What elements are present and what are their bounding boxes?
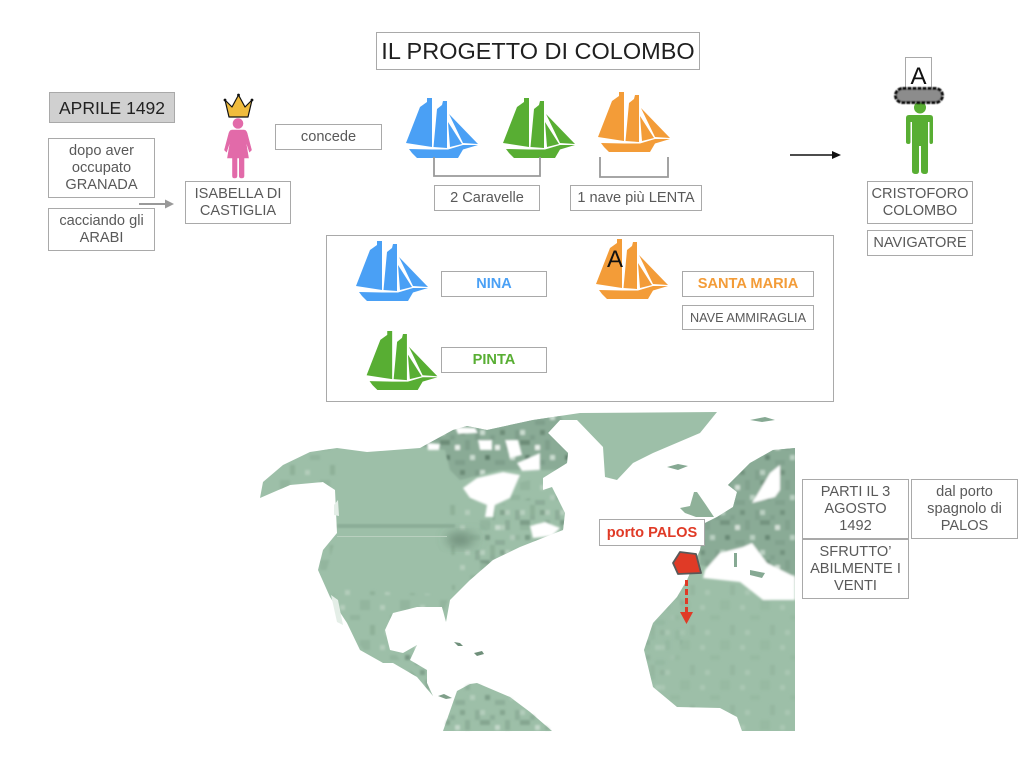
map: Mediterranean and Baltic white areas (703, 465, 795, 600)
label: Santa Maria (682, 271, 814, 297)
label: Santa Maria: SANTA MARIA (698, 276, 798, 292)
map: islands of Iceland, Svalbard, UK (667, 417, 775, 470)
arrow: from Granada to Isabella (139, 200, 174, 208)
text box: cacciando gli Arabi: cacciando gli (59, 213, 144, 229)
text box: sfruttò abilmente i venti: SFRUTTO’ (820, 544, 891, 560)
map: Hudson Bay white patch (463, 472, 520, 517)
map: North Atlantic, Americas, Europe and Africa (260, 412, 795, 731)
text box: Isabella di Castiglia (185, 181, 291, 224)
bracket: two caravels (434, 157, 540, 176)
label: Pinta (441, 347, 547, 373)
text box: concede (275, 124, 382, 150)
text box: Cristoforo Colombo: COLOMBO (883, 203, 957, 219)
text box: sfruttò abilmente i venti (802, 539, 909, 599)
icon: Pinta ship (367, 331, 437, 390)
title: IL PROGETTO DI COLOMBO (381, 38, 695, 64)
text box: dopo aver occupato Granada: dopo aver (69, 143, 134, 159)
title (376, 32, 700, 70)
icon: green ship (503, 98, 575, 158)
letter box on the hat (905, 57, 932, 93)
icon: Santa Maria ship with letter: A (607, 246, 623, 273)
label: porto Palos: porto PALOS (607, 524, 697, 540)
text box: dal porto spagnolo di Palos: dal porto (936, 484, 993, 500)
icon: Palos marker (673, 552, 701, 574)
text box: dal porto spagnolo di Palos: spagnolo di (927, 501, 1002, 517)
map land: Europe and Africa (644, 448, 795, 731)
icon: crown (224, 94, 253, 117)
text box: 2 Caravelle: 2 Caravelle (450, 190, 524, 206)
label: Nina: NINA (476, 276, 512, 292)
label: porto Palos (599, 519, 705, 546)
bracket: one slower ship (600, 157, 668, 177)
text box: partì il 3 agosto 1492: AGOSTO (824, 501, 887, 517)
arrow: route from Palos (680, 580, 693, 624)
text box: 2 Caravelle (434, 185, 540, 211)
text box: partì il 3 agosto 1492: PARTI IL 3 (821, 484, 890, 500)
text box: dal porto spagnolo di Palos: PALOS (941, 518, 988, 534)
text box: 1 nave più lenta: 1 nave più LENTA (577, 190, 695, 206)
label: Nave ammiraglia (682, 305, 814, 330)
text box: dopo aver occupato Granada: GRANADA (65, 177, 138, 193)
text box: Navigatore (867, 230, 973, 256)
text box: dal porto spagnolo di Palos (911, 479, 1018, 539)
text box: Cristoforo Colombo: CRISTOFORO (871, 186, 969, 202)
icon: Santa Maria ship with letter (596, 239, 668, 299)
text box: cacciando gli Arabi (48, 208, 155, 251)
icon: hat (896, 88, 942, 102)
icon: Colombo, man figure (906, 102, 933, 174)
label: Nave ammiraglia: NAVE AMMIRAGLIA (690, 310, 806, 324)
text box: 1 nave più lenta (570, 185, 702, 211)
icon: Nina ship (356, 241, 428, 301)
text box: sfruttò abilmente i venti: ABILMENTE I (810, 561, 901, 577)
letter box on the hat: A (910, 63, 926, 90)
text box: Isabella di Castiglia: ISABELLA DI (195, 186, 281, 202)
date box: Aprile 1492 (49, 92, 175, 123)
icon: orange ship (598, 92, 670, 152)
text box: concede: concede (301, 129, 356, 145)
text box: sfruttò abilmente i venti: VENTI (834, 578, 877, 594)
label: Nina (441, 271, 547, 297)
text box: Cristoforo Colombo (867, 181, 973, 224)
panel: the three ships (326, 235, 834, 402)
arrow: to Colombo (790, 151, 841, 159)
text box: dopo aver occupato Granada: occupato (72, 160, 131, 176)
text box: cacciando gli Arabi: ARABI (80, 230, 123, 246)
icon: Isabella, woman figure (224, 118, 252, 178)
text box: dopo aver occupato Granada (48, 138, 155, 198)
text box: partì il 3 agosto 1492 (802, 479, 909, 539)
map land: South America (443, 683, 552, 731)
map land: North America and Greenland (260, 412, 717, 696)
label: Pinta: PINTA (473, 352, 515, 368)
text box: partì il 3 agosto 1492: 1492 (839, 518, 872, 534)
icon: blue ship (406, 98, 478, 158)
text box: Navigatore: NAVIGATORE (873, 235, 967, 251)
date box: Aprile 1492: APRILE 1492 (59, 98, 165, 118)
map: Caribbean islands (454, 642, 484, 656)
text box: Isabella di Castiglia: CASTIGLIA (200, 203, 276, 219)
